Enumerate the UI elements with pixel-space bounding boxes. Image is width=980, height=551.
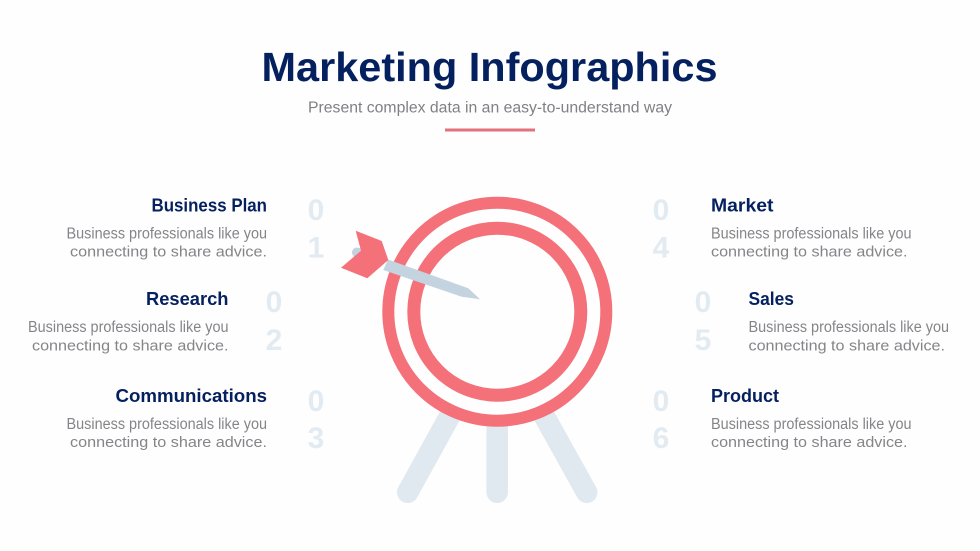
number 04: 4: [653, 232, 670, 264]
number 02: [266, 286, 282, 357]
item 03: Communications: [66, 385, 324, 455]
target inner ring: [414, 228, 581, 395]
description: connecting to share advice.: [711, 244, 908, 261]
number 04: [653, 194, 670, 264]
heading: Product: [711, 386, 779, 406]
description: connecting to share advice.: [70, 244, 267, 261]
number 01: 1: [308, 232, 324, 264]
description: [28, 319, 229, 354]
description: [66, 416, 267, 451]
description: Business professionals like you: [28, 319, 228, 336]
item 02: Research: [28, 286, 282, 357]
number 05: 5: [695, 324, 711, 357]
title: Marketing Infographics: [262, 44, 718, 90]
description: Business professionals like you: [711, 416, 912, 433]
number 01: 0: [308, 194, 324, 227]
heading: Sales: [748, 289, 794, 309]
target illustration: [341, 203, 606, 492]
number 03: 3: [308, 422, 324, 455]
item 05: Sales: [695, 286, 949, 357]
description: [711, 416, 912, 451]
description: [711, 225, 912, 261]
subtitle: Present complex data in an easy-to-understand way: [308, 100, 672, 116]
heading: Research: [146, 289, 228, 309]
heading: Communications: [116, 386, 267, 406]
number 06: 0: [653, 385, 669, 418]
number 02: 2: [266, 324, 282, 357]
heading: Market: [711, 196, 774, 216]
item 04: Market: [653, 194, 912, 264]
number 06: 6: [653, 422, 669, 455]
number 01: [308, 194, 324, 264]
description: connecting to share advice.: [70, 434, 267, 451]
number 02: 0: [266, 286, 282, 319]
description: connecting to share advice.: [711, 434, 908, 451]
number 05: [695, 286, 711, 357]
description: Business professionals like you: [66, 225, 267, 242]
description: connecting to share advice.: [32, 338, 229, 354]
target outer ring: [388, 203, 606, 421]
number 04: 0: [653, 194, 669, 227]
item 06: Product: [653, 385, 912, 455]
title underline: [445, 128, 535, 132]
number 06: [653, 385, 669, 455]
heading: Business Plan: [152, 196, 267, 216]
description: Business professionals like you: [711, 225, 912, 242]
description: [748, 319, 949, 354]
description: Business professionals like you: [748, 319, 949, 336]
description: connecting to share advice.: [748, 338, 945, 354]
description: Business professionals like you: [66, 416, 267, 433]
number 05: 0: [695, 286, 711, 319]
arrow: [341, 231, 480, 299]
item 01: Business Plan: [66, 194, 324, 264]
description: [66, 225, 267, 261]
number 03: [308, 385, 324, 455]
number 03: 0: [308, 385, 324, 418]
target stand legs: [408, 412, 587, 492]
